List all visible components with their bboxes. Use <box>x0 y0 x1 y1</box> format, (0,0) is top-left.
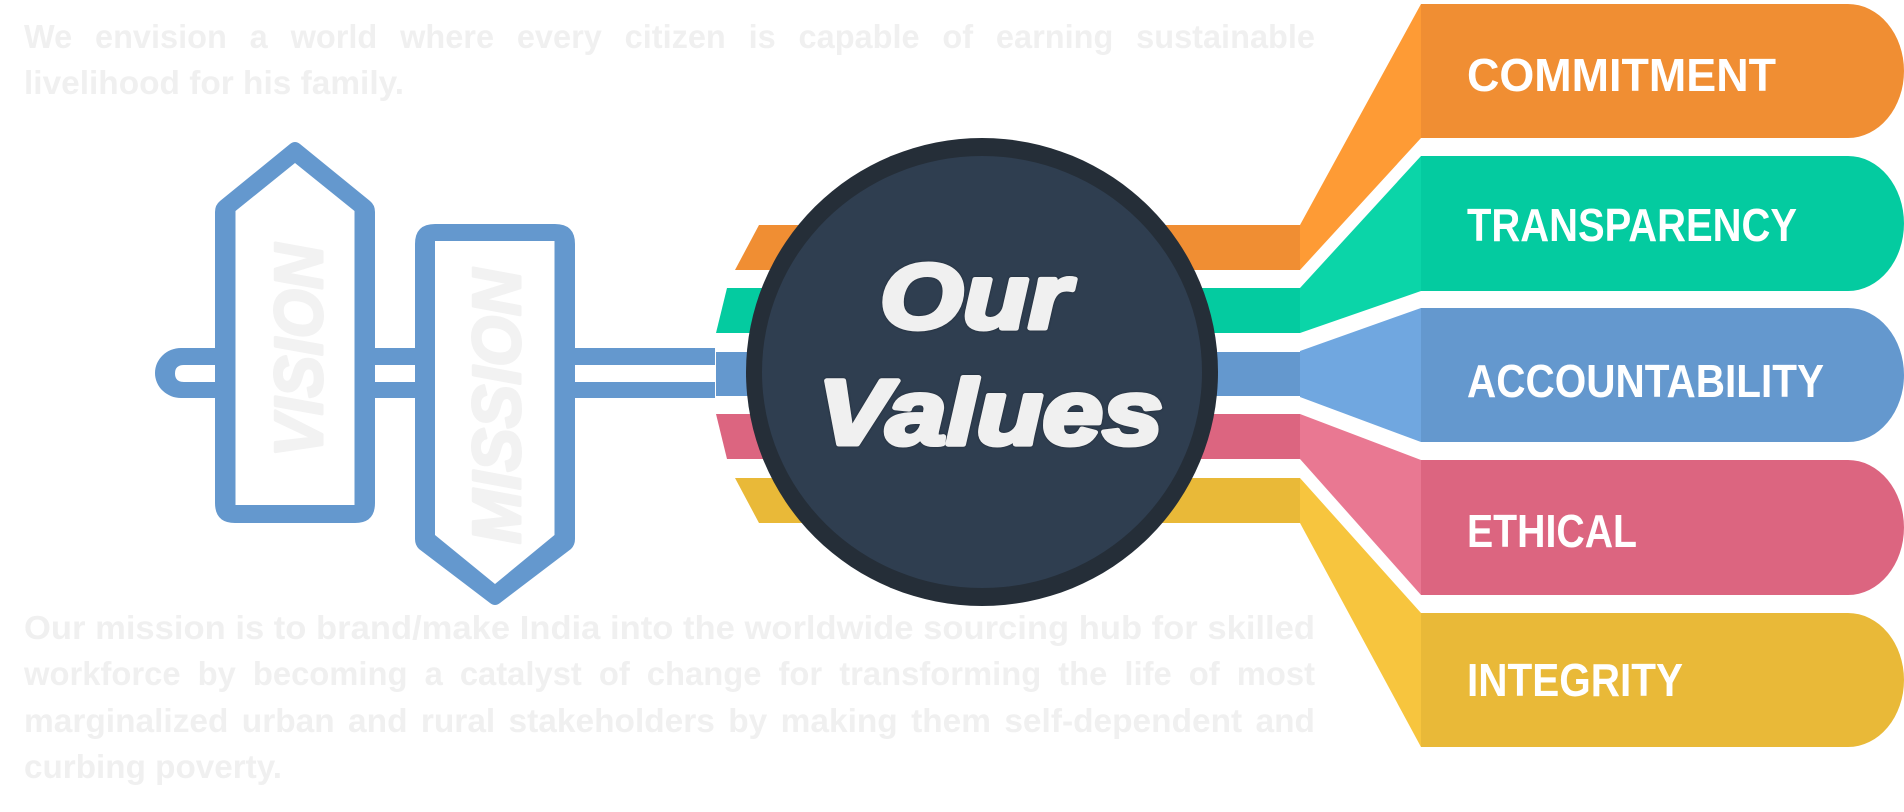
vision vertical label: VISION <box>261 242 337 457</box>
ribbon: accountability <box>716 308 1904 442</box>
icon: vision and mission signpost <box>155 142 715 605</box>
central circle: our values <box>746 138 1218 606</box>
vision statement text <box>24 18 1315 101</box>
mission statement text: curbing poverty. <box>24 748 282 785</box>
ribbon: transparency: TRANSPARENCY <box>1467 199 1797 251</box>
mission statement text: workforce by becoming a catalyst of change for transforming the life of most <box>23 655 1315 692</box>
mission statement text: Our mission is to brand/make India into the worldwide sourcing hub for skilled <box>24 609 1315 646</box>
ribbon: ethical: ETHICAL <box>1467 505 1637 557</box>
ribbon: accountability: ACCOUNTABILITY <box>1467 355 1824 407</box>
ribbon: commitment <box>735 4 1904 270</box>
heading: our: Our <box>880 246 1075 348</box>
ribbon: transparency <box>716 156 1904 333</box>
ribbon: integrity: INTEGRITY <box>1467 654 1683 706</box>
signpost horizontal rail <box>155 348 715 398</box>
vision statement text: livelihood for his family. <box>24 64 404 101</box>
vision arrow outline <box>215 142 375 523</box>
mission statement text <box>23 609 1315 785</box>
heading: values: Values <box>818 362 1163 464</box>
ribbon: commitment: COMMITMENT <box>1467 49 1776 101</box>
mission arrow outline <box>415 224 575 605</box>
ribbon: integrity <box>735 478 1904 747</box>
ribbon: ethical <box>716 414 1904 595</box>
vision statement text: We envision a world where every citizen is capable of earning sustainable <box>24 18 1315 55</box>
mission statement text: marginalized urban and rural stakeholders by making them self-dependent and <box>24 702 1315 739</box>
mission vertical label: MISSION <box>459 267 535 544</box>
